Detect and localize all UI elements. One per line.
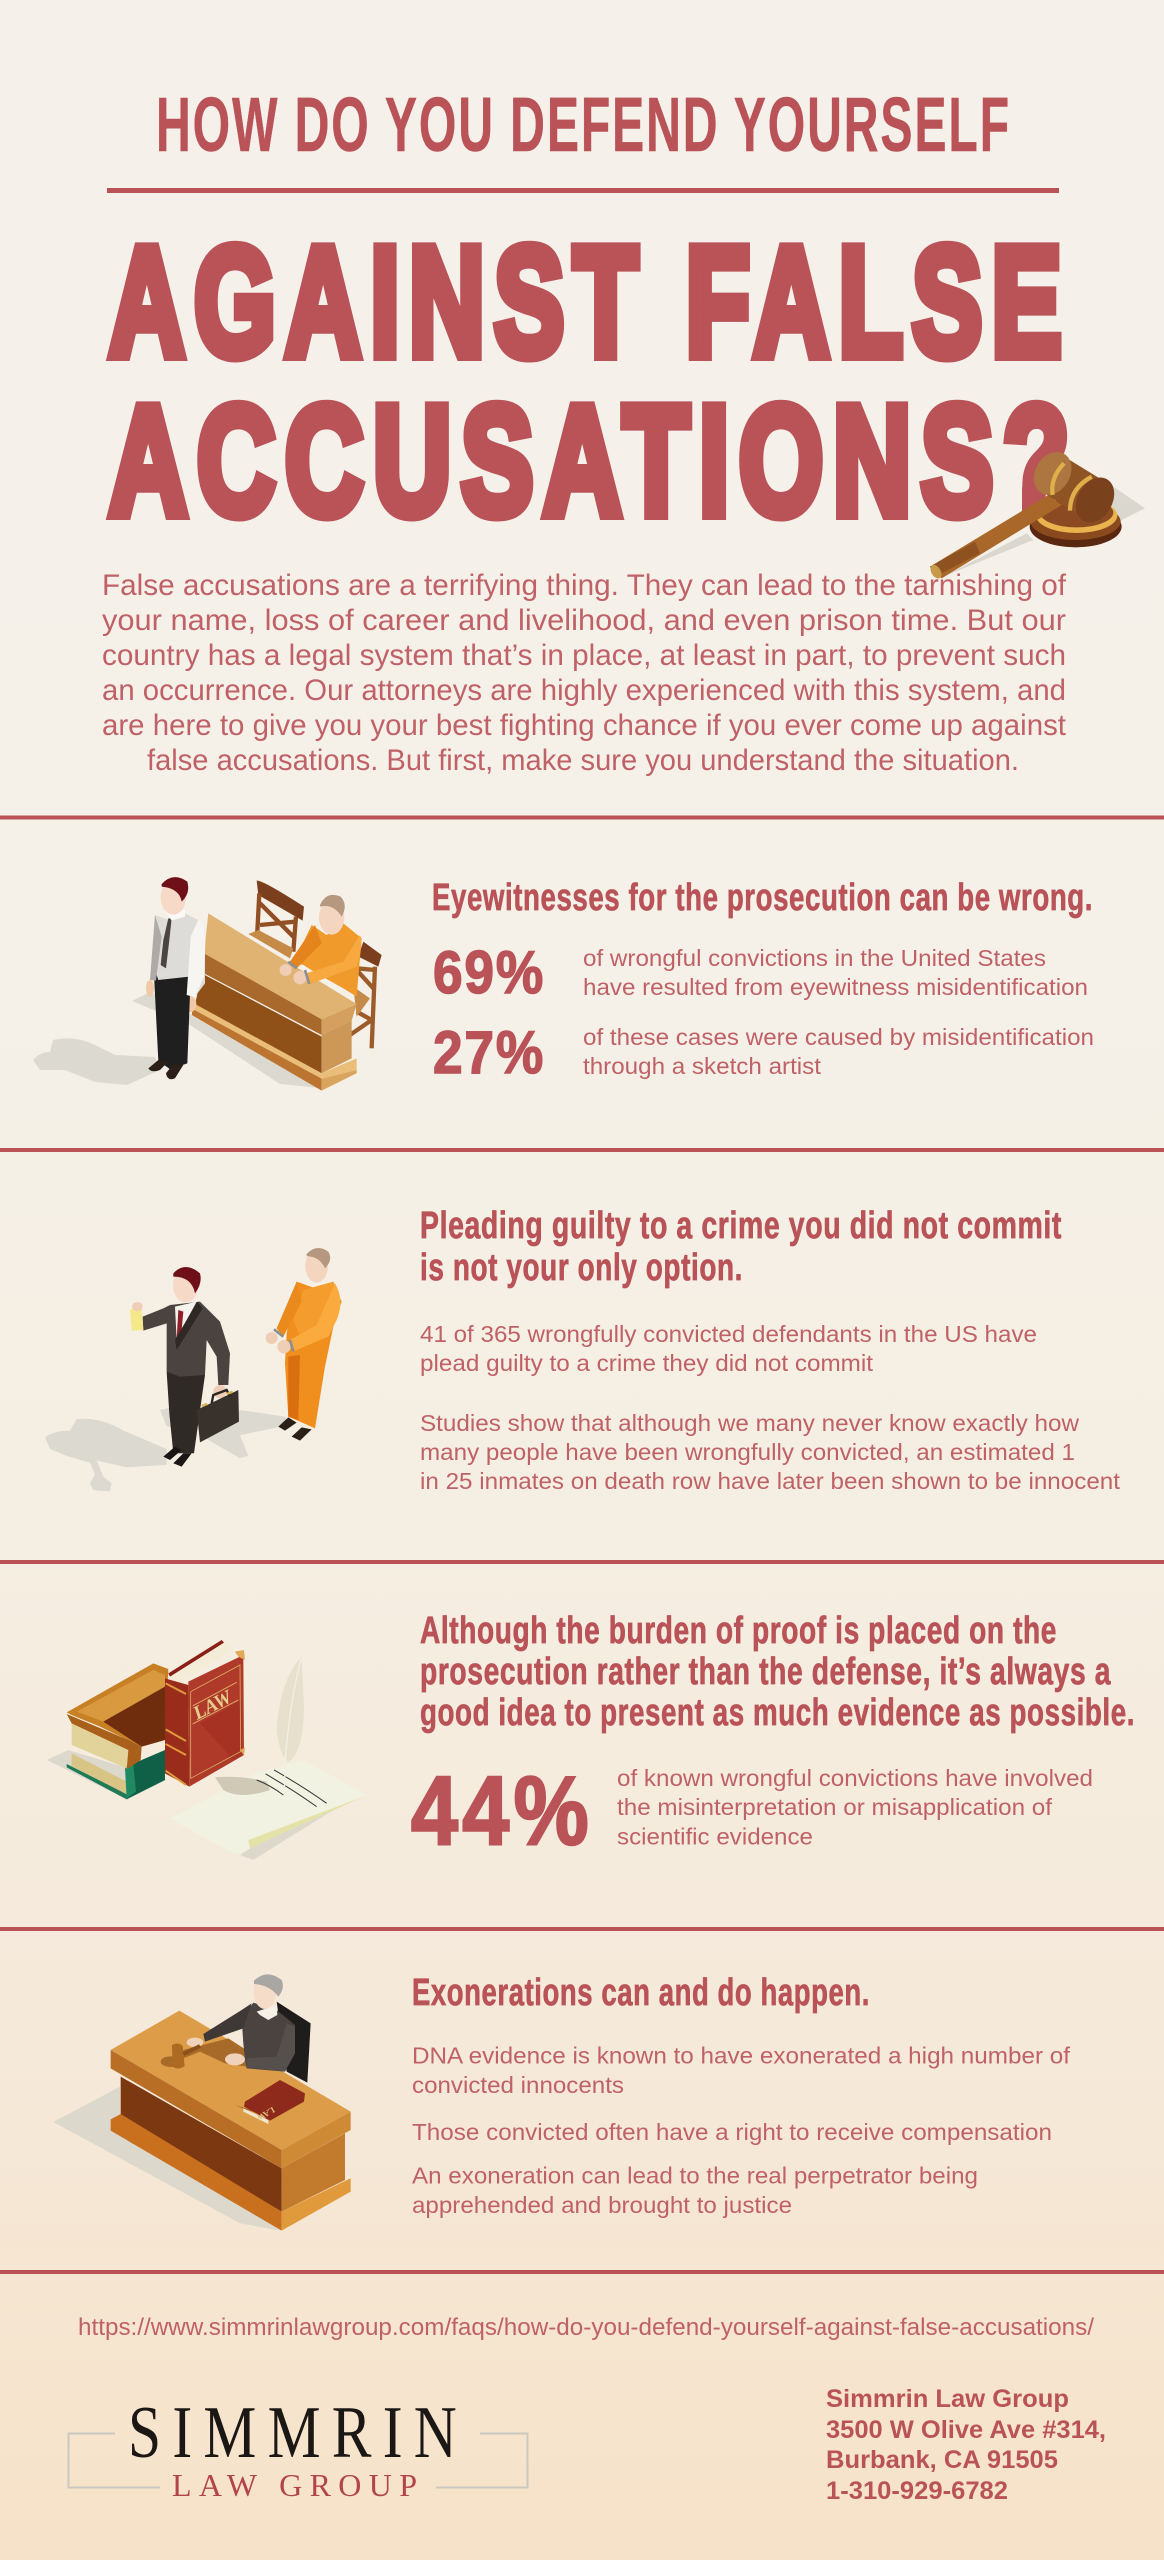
stat: 44%: of known wrongful convictions have involved [617,1765,1093,1791]
panel: exonerations [53,1972,1071,2231]
contact details: 1-310-929-6782 [826,2477,1008,2505]
text: real perpetrator: An exoneration can lead to the real perpetrator being [412,2162,978,2188]
intro paragraph [102,569,1067,777]
stat: 69%: of wrongful convictions in the United States [583,945,1046,971]
stat: 27%: of these cases were caused by misidentification [583,1024,1094,1050]
stat: 27%: 27% [433,1019,545,1086]
logo: Simmrin Law Group [68,2392,528,2503]
intro paragraph: an occurrence. Our attorneys are highly experienced with this system, and [102,674,1066,707]
text: compensation: Those convicted often have a right to receive compensation [412,2119,1052,2145]
stat: 69% [433,939,1088,1006]
heading [420,1610,1135,1734]
source url: https://www.simmrinlawgroup.com/faqs/how-do-you-defend-yourself-against-false-accusations/ [78,2314,1094,2341]
contact details: Simmrin Law Group [826,2385,1069,2413]
illustration: lawyer and prisoner [45,1248,342,1491]
intro paragraph: country has a legal system that’s in place, at least in part, to prevent such [102,639,1066,672]
contact details: 3500 W Olive Ave #314, [826,2416,1106,2444]
stat: 44%: the misinterpretation or misapplication of [617,1794,1053,1820]
stat: 44%: scientific evidence [617,1824,813,1850]
stat: 69%: have resulted from eyewitness misidentification [583,974,1088,1000]
text: DNA evidence: DNA evidence is known to have exonerated a high number of [412,2042,1071,2068]
heading: Exonerations can and do happen. [412,1972,870,2014]
stat: 69%: 69% [433,939,545,1006]
text: 41 of 365: plead guilty to a crime they did not commit [420,1350,874,1376]
text: 41 of 365: 41 of 365 wrongfully convicted defendants in the US have [420,1321,1037,1347]
stat: 44%: 44% [411,1756,593,1865]
title: against false accusations [109,215,1079,547]
intro paragraph: your name, loss of career and livelihood, and even prison time. But our [102,604,1066,637]
illustration: law books and quill [47,1640,367,1860]
text: real perpetrator [412,2162,978,2218]
intro paragraph: are here to give you your best fighting chance if you ever come up against [102,709,1066,742]
panel: pleading guilty [45,1205,1121,1494]
text: 41 of 365 [420,1321,1037,1376]
intro paragraph: False accusations are a terrifying thing. They can lead to the tarnishing of [102,569,1067,602]
label: LAW: LAW [189,1686,237,1725]
text: DNA evidence: convicted innocents [412,2072,624,2098]
stat: 27%: through a sketch artist [583,1053,822,1079]
illustration: witness and defendant at desk [33,877,382,1091]
stat: 44% [411,1756,1093,1865]
illustration: judge at bench [53,1974,351,2231]
logo: Simmrin Law Group: LAW GROUP [172,2467,417,2503]
label: LAW on book: LAW [254,2105,277,2124]
panel: eyewitnesses [33,877,1094,1091]
stat: 27% [433,1019,1094,1086]
heading [420,1205,1062,1289]
text: studies: Studies show that although we many never know exactly how [420,1410,1079,1436]
intro paragraph: false accusations. But first, make sure you understand the situation. [147,744,1019,777]
text: studies: in 25 inmates on death row have later been shown to be innocent [420,1468,1121,1494]
contact details [826,2385,1106,2505]
icon: gavel [928,445,1145,580]
text: real perpetrator: apprehended and brought to justice [412,2192,792,2218]
contact details: Burbank, CA 91505 [826,2446,1058,2474]
panel: burden of proof [47,1610,1135,1865]
logo: Simmrin Law Group: SIMMRIN [128,2392,468,2474]
text: DNA evidence [412,2042,1071,2098]
text: studies: many people have been wrongfully convicted, an estimated 1 [420,1439,1075,1465]
text: studies [420,1410,1121,1494]
heading: is not your only option. [420,1247,743,1289]
